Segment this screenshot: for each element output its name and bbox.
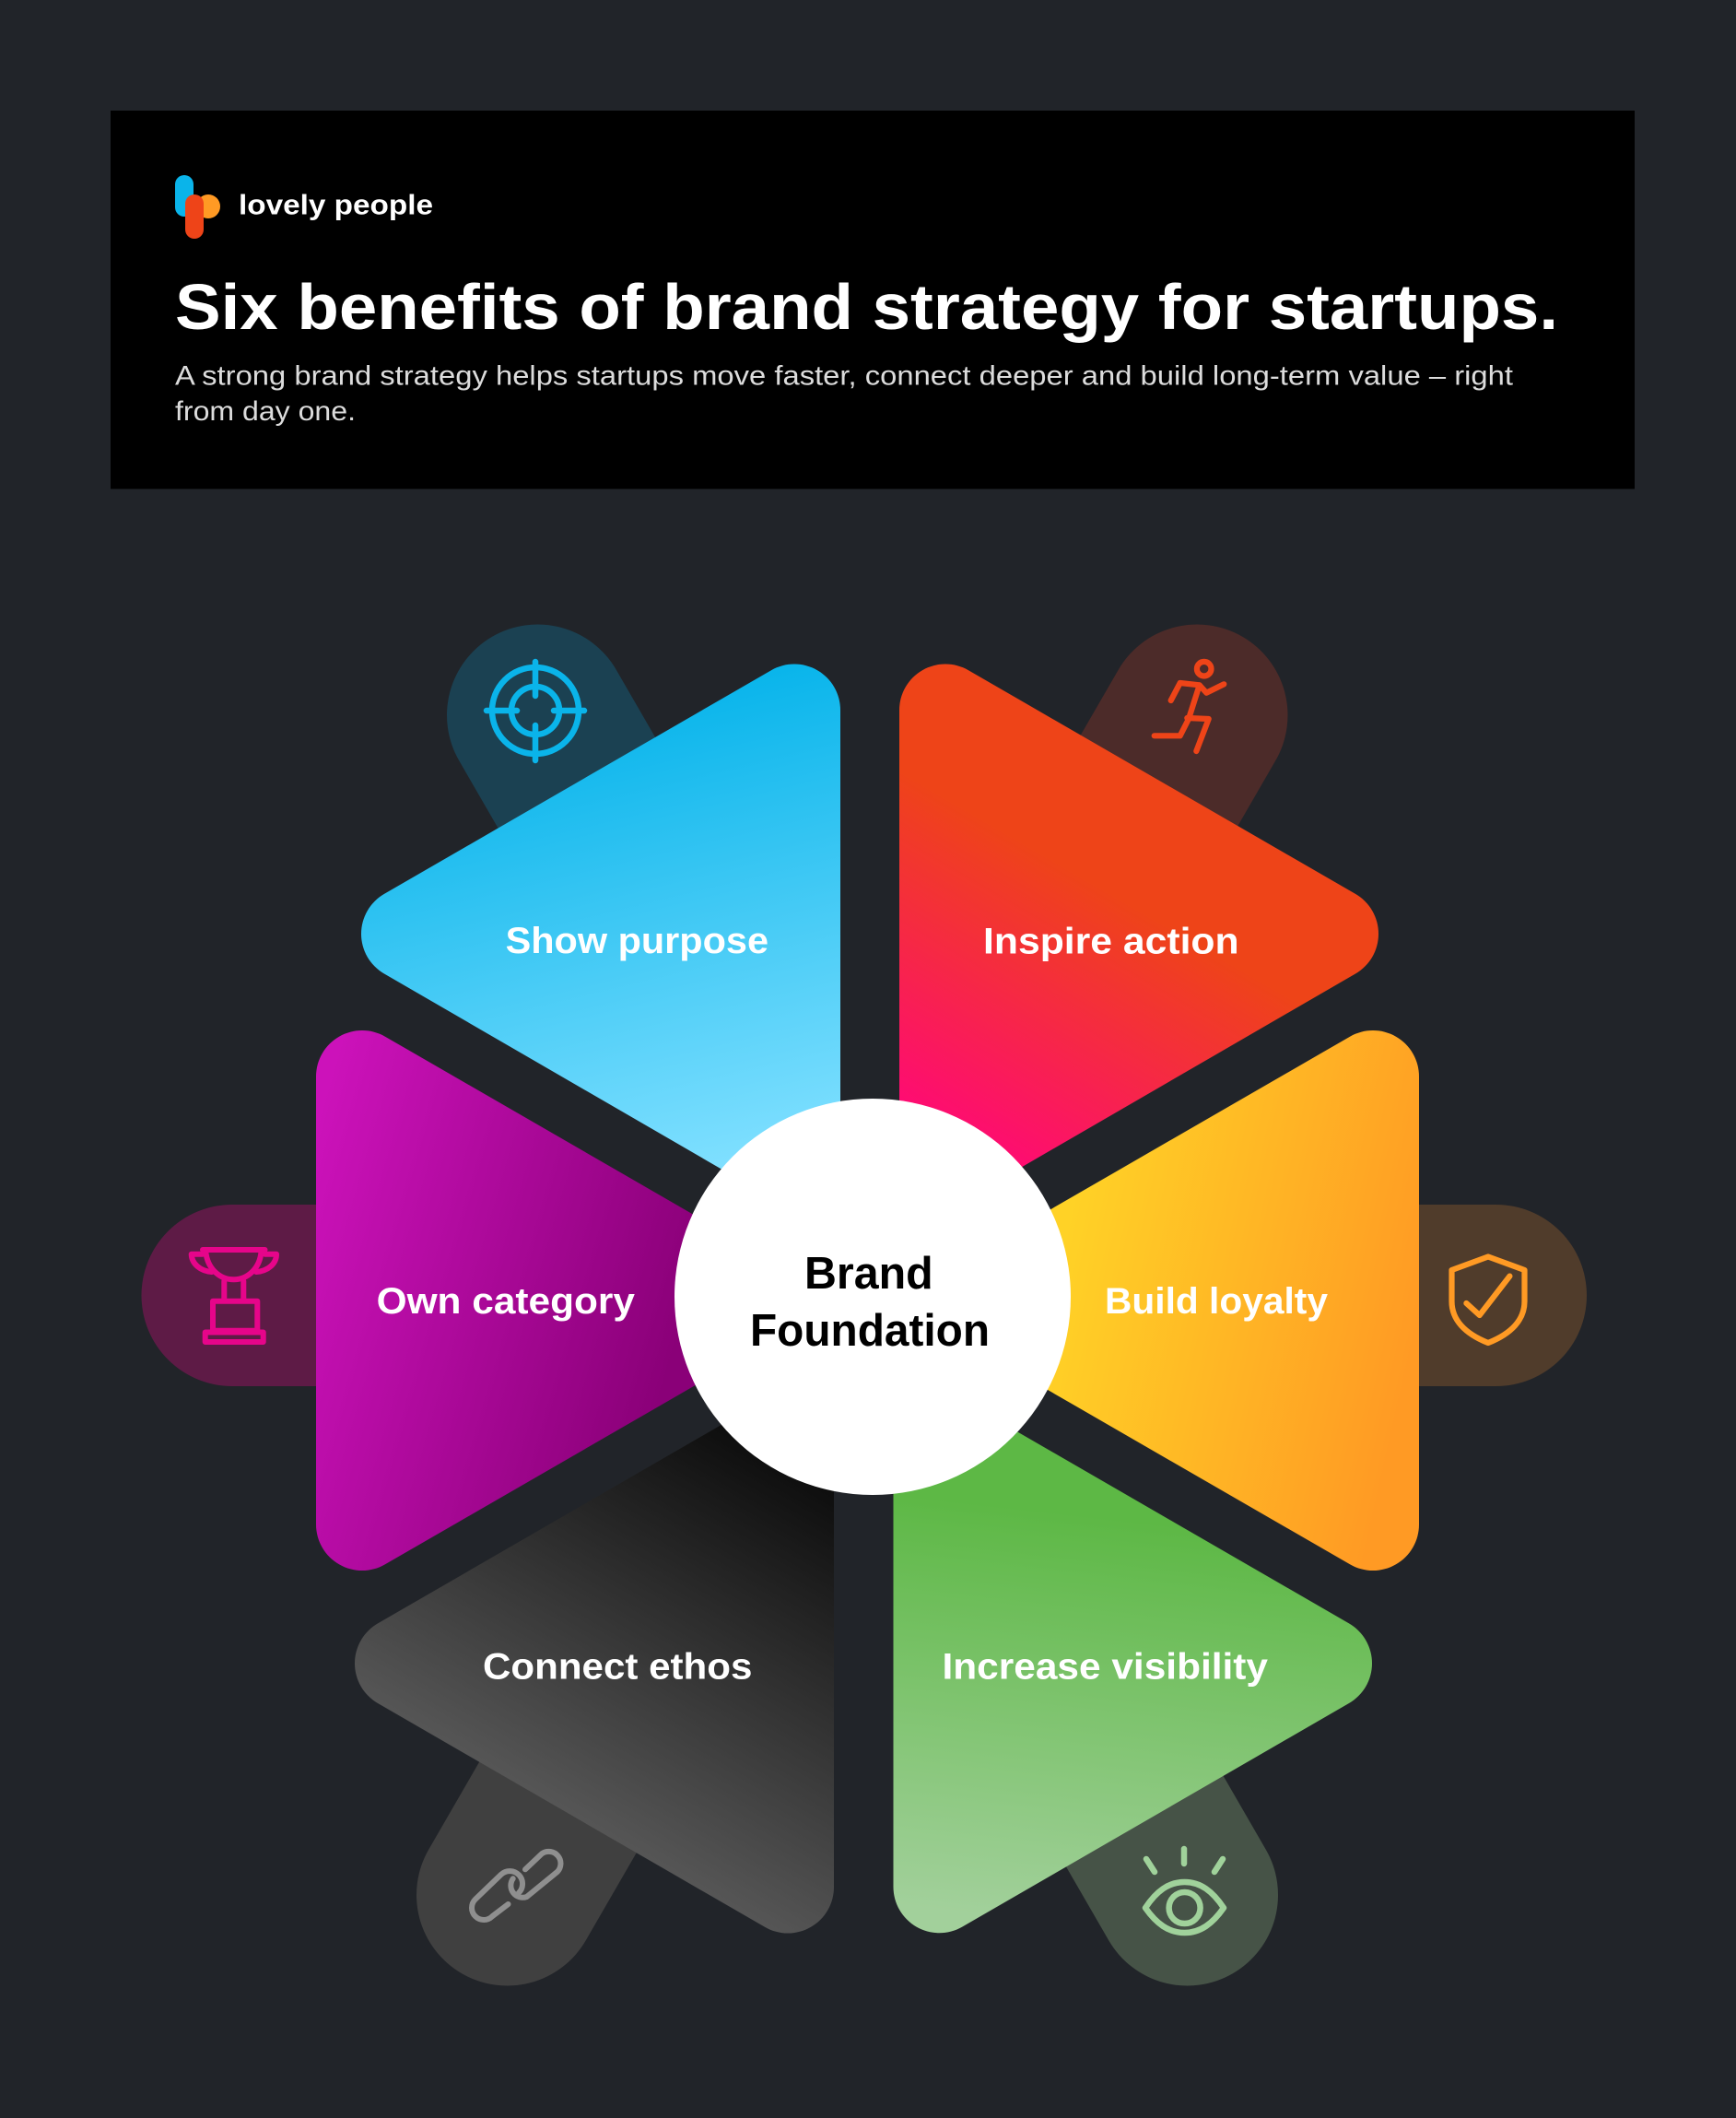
segment: increase visibility — [894, 1394, 1372, 1933]
segment: build loyalty: Build loyalty — [1105, 1281, 1329, 1322]
icon: trophy — [192, 1250, 276, 1342]
icon: shield — [1452, 1257, 1524, 1343]
segment: own category — [316, 1030, 796, 1571]
title: Six benefits of brand strategy for startups. — [175, 271, 1558, 343]
tab: own category icon — [192, 1250, 369, 1342]
tab: connect ethos icon — [472, 1736, 599, 1920]
centre circle: brand foundation: Foundation — [750, 1306, 990, 1356]
tab: build loyalty icon — [1364, 1257, 1524, 1343]
segment: increase visibility: Increase visibility — [942, 1647, 1269, 1688]
icon: target — [487, 662, 584, 760]
segment: build loyalty — [939, 1030, 1419, 1571]
segment: own category: Own category — [377, 1281, 636, 1322]
tab: inspire action icon — [1105, 662, 1224, 875]
segment: show purpose — [361, 665, 840, 1204]
segment: show purpose: Show purpose — [506, 921, 768, 961]
segment: inspire action: Inspire action — [983, 922, 1239, 962]
subtitle — [175, 361, 1514, 427]
icon: chain link — [472, 1852, 560, 1920]
segment: connect ethos: Connect ethos — [483, 1647, 752, 1688]
logo: lovely people — [175, 175, 433, 239]
segment: connect ethos — [355, 1394, 834, 1933]
logo: lovely people: lovely people — [239, 189, 433, 221]
panel: header — [111, 111, 1635, 488]
icon: runner — [1155, 662, 1224, 751]
centre circle: brand foundation — [674, 1099, 1071, 1495]
tab: show purpose icon — [487, 662, 630, 875]
tab: increase visibility icon — [1095, 1736, 1224, 1933]
segment: inspire action — [899, 665, 1378, 1204]
icon: eye — [1145, 1849, 1224, 1933]
centre circle: brand foundation: Brand — [804, 1249, 933, 1299]
subtitle: A strong brand strategy helps startups move faster, connect deeper and build long-term value – right — [175, 361, 1514, 392]
subtitle: from day one. — [175, 396, 356, 427]
